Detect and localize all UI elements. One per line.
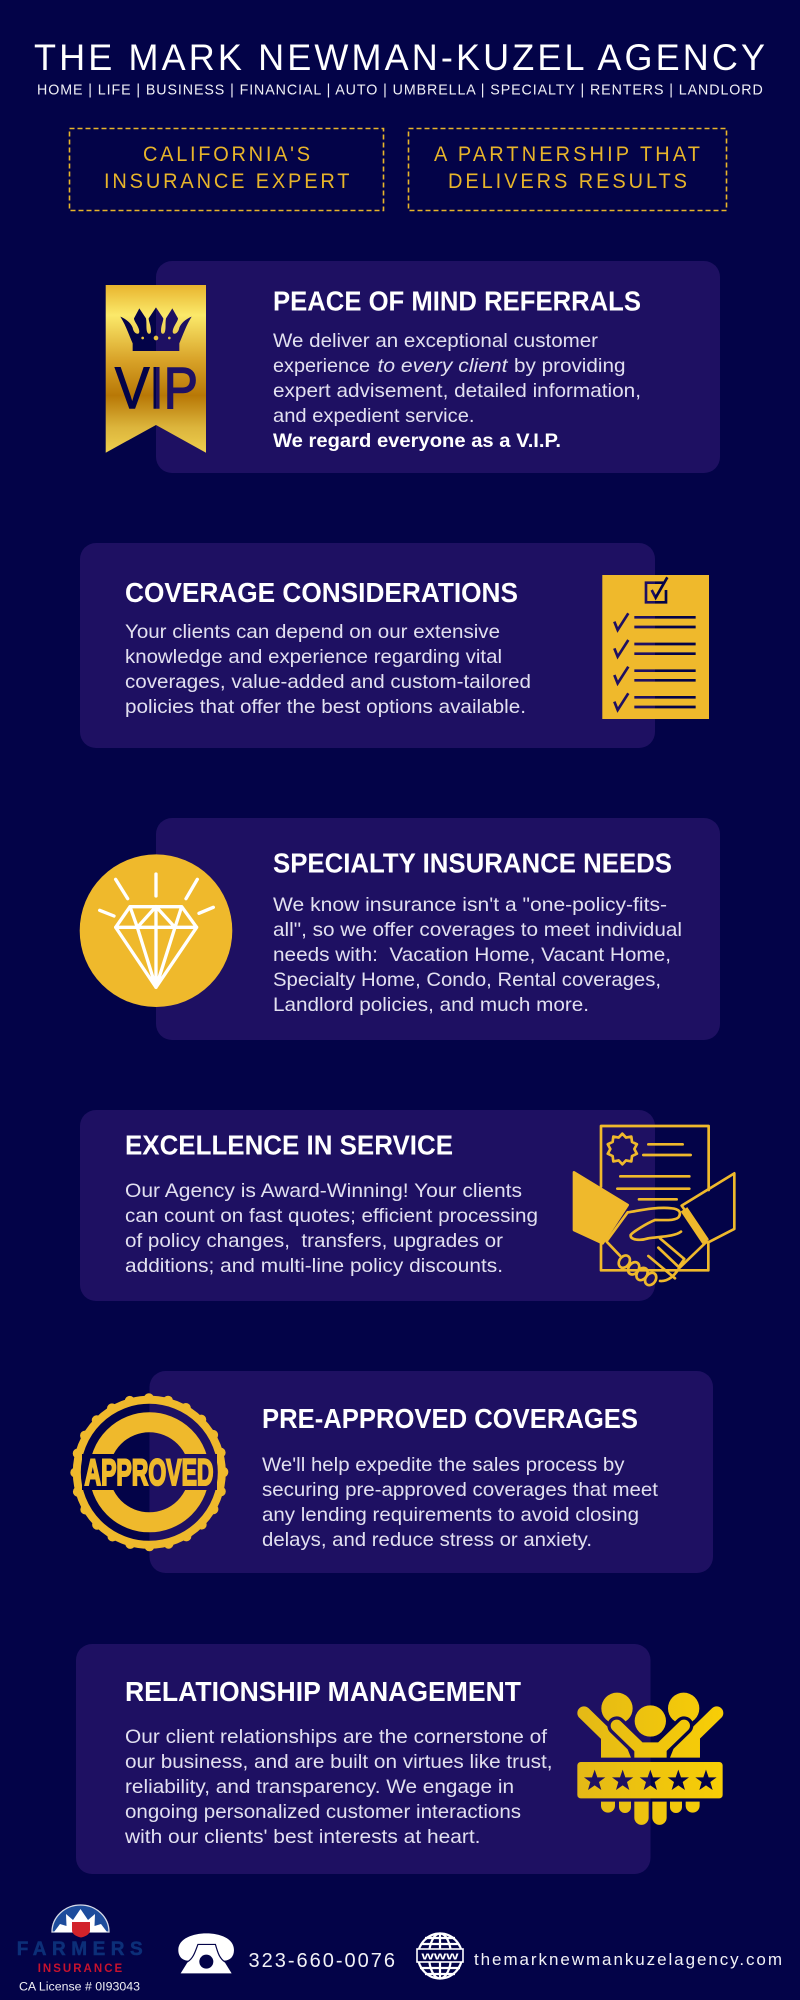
icon: globe www: www xyxy=(420,1950,459,1962)
callout: California's insurance expert xyxy=(70,128,384,210)
body text xyxy=(273,330,641,452)
icon: VIP ribbon xyxy=(106,285,206,453)
heading: COVERAGE CONSIDERATIONS xyxy=(125,577,518,608)
heading: PRE-APPROVED COVERAGES xyxy=(262,1403,638,1434)
body text: expert advisement, detailed information, xyxy=(273,380,641,402)
panel: pre-approved coverages xyxy=(75,1371,713,1573)
title: THE MARK NEWMAN-KUZEL AGENCY xyxy=(34,36,765,78)
body text: any lending requirements to avoid closing xyxy=(262,1504,639,1526)
heading: PEACE OF MIND REFERRALS xyxy=(273,286,641,316)
footer: Farmers Insurance logo: CA License # 0I93043 xyxy=(19,1980,140,1994)
body text: We deliver an exceptional customer xyxy=(273,330,599,352)
body text: experience xyxy=(273,355,370,377)
body text: by providing xyxy=(514,355,626,377)
body text: knowledge and experience regarding vital xyxy=(125,646,502,668)
body text: and expedient service. xyxy=(273,405,474,427)
heading: RELATIONSHIP MANAGEMENT xyxy=(125,1676,521,1707)
body text: delays, and reduce stress or anxiety. xyxy=(262,1529,592,1551)
icon: people with five stars xyxy=(577,1693,723,1825)
icon: telephone xyxy=(178,1933,234,1973)
icon: handshake and document xyxy=(574,1126,734,1287)
body text: Landlord policies, and much more. xyxy=(273,994,589,1016)
body text: Specialty Home, Condo, Rental coverages, xyxy=(273,969,661,991)
body text: of policy changes, transfers, upgrades or xyxy=(125,1230,504,1252)
icon: VIP ribbon: VIP xyxy=(115,356,198,421)
body text: We regard everyone as a V.I.P. xyxy=(273,430,561,452)
body text: all", so we offer coverages to meet individual xyxy=(273,919,682,941)
body text: Our Agency is Award-Winning! Your clients xyxy=(125,1180,522,1202)
body text: ongoing personalized customer interactions xyxy=(125,1801,521,1823)
footer: Farmers Insurance logo xyxy=(17,1905,143,1994)
body text: We'll help expedite the sales process by xyxy=(262,1454,625,1476)
body text: our business, and are built on virtues like trust, xyxy=(125,1751,552,1773)
panel: peace of mind referrals xyxy=(106,261,720,473)
callout: partnership: A PARTNERSHIP THAT xyxy=(434,142,700,166)
phone number: 323-660-0076 xyxy=(248,1950,395,1972)
icon: diamond xyxy=(80,854,232,1007)
body text: with our clients' best interests at heart. xyxy=(124,1826,480,1848)
heading: EXCELLENCE IN SERVICE xyxy=(125,1130,453,1160)
callout: partnership xyxy=(408,128,726,210)
panel: relationship management xyxy=(76,1644,723,1874)
body text xyxy=(273,894,682,1016)
body text: to every client xyxy=(378,355,509,377)
body text: additions; and multi-line policy discounts. xyxy=(125,1255,503,1277)
body text: We know insurance isn't a "one-policy-fits- xyxy=(273,894,667,916)
body text: can count on fast quotes; efficient processing xyxy=(125,1205,538,1227)
body text: Your clients can depend on our extensive xyxy=(125,621,500,643)
icon: checklist xyxy=(602,575,709,719)
panel: specialty insurance needs xyxy=(80,818,720,1040)
icon: globe www xyxy=(417,1934,463,1978)
body text xyxy=(262,1454,659,1551)
navigation line: HOME | LIFE | BUSINESS | FINANCIAL | AUTO | UMBRELLA | SPECIALTY | RENTERS | LANDLORD xyxy=(37,82,763,99)
body text: coverages, value-added and custom-tailored xyxy=(125,671,531,693)
callout: California's insurance expert: CALIFORNIA'S xyxy=(143,142,310,166)
icon: approved seal: APPROVED xyxy=(84,1452,214,1493)
heading: SPECIALTY INSURANCE NEEDS xyxy=(273,848,672,878)
callout: California's insurance expert: INSURANCE EXPERT xyxy=(104,169,350,193)
body text: policies that offer the best options available. xyxy=(125,696,526,718)
website url: themarknewmankuzelagency.com xyxy=(474,1950,782,1969)
panel: excellence in service xyxy=(80,1110,734,1301)
body text: securing pre-approved coverages that meet xyxy=(262,1479,659,1501)
footer: Farmers Insurance logo: FARMERS xyxy=(17,1939,143,1960)
panel: coverage considerations xyxy=(80,543,709,748)
body text xyxy=(124,1726,552,1848)
body text xyxy=(125,1180,538,1277)
body text: Our client relationships are the cornerstone of xyxy=(125,1726,548,1748)
body text: needs with: Vacation Home, Vacant Home, xyxy=(273,944,671,966)
body text xyxy=(125,621,531,718)
icon: approved seal xyxy=(75,1398,223,1546)
callout: partnership: DELIVERS RESULTS xyxy=(448,169,687,193)
footer: Farmers Insurance logo: INSURANCE xyxy=(38,1963,123,1975)
body text: reliability, and transparency. We engage in xyxy=(125,1776,514,1798)
